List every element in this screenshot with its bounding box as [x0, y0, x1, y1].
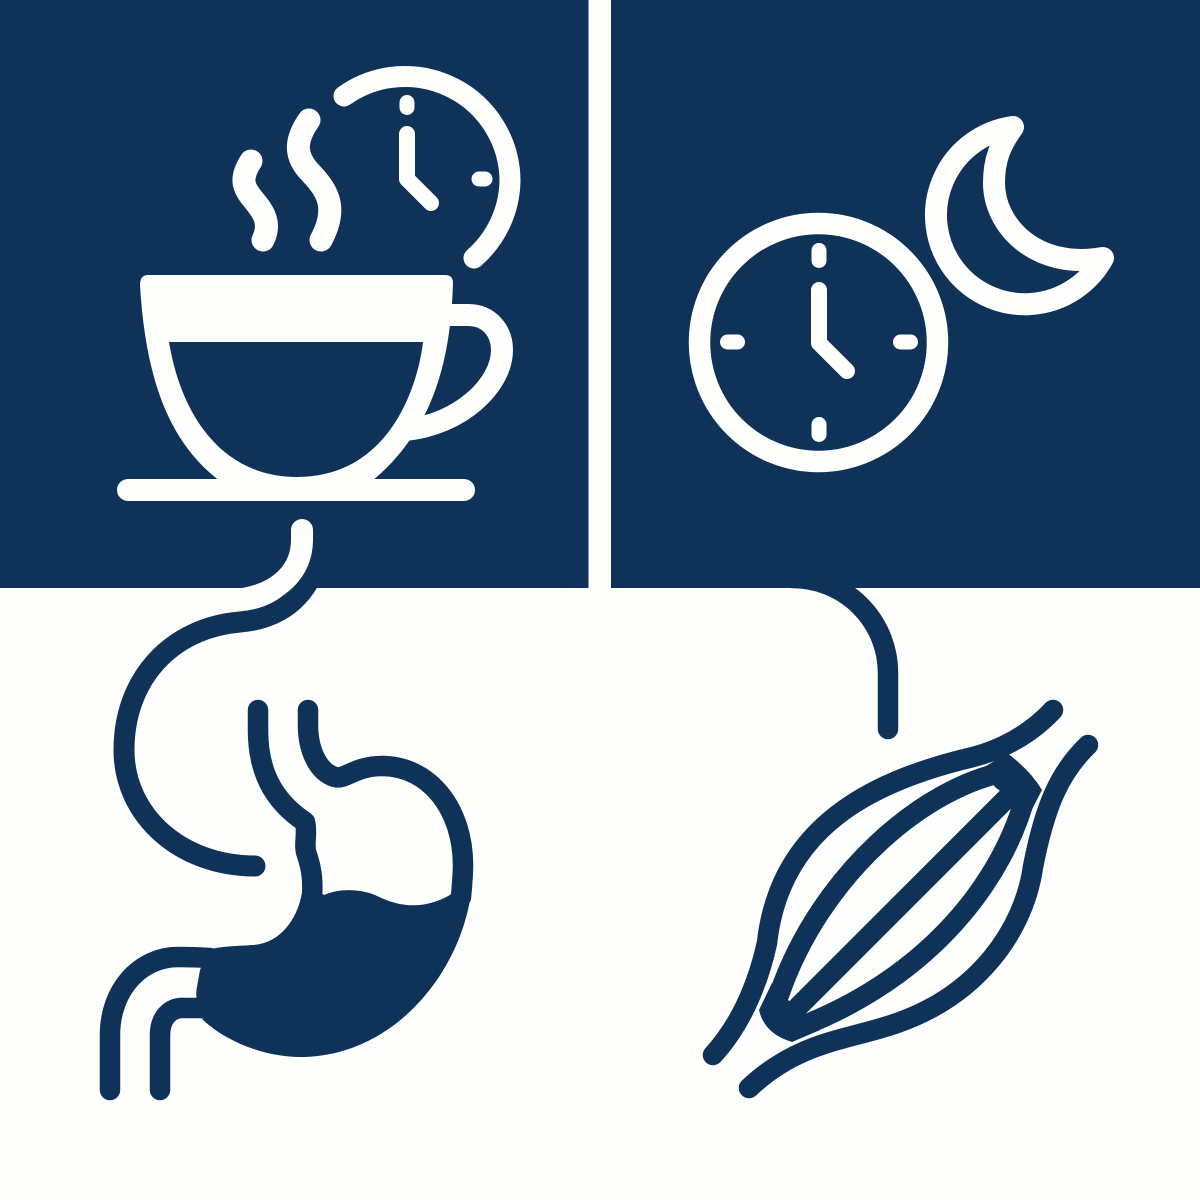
icon: stomach: [110, 710, 473, 1090]
muscle end caps: [759, 753, 1042, 1042]
muscle fibres and tendons: [713, 710, 1088, 1088]
icon: crescent moon: [936, 127, 1103, 304]
panel: coffee timing: [0, 0, 588, 588]
stomach contents: [196, 867, 473, 1057]
icon: muscle: [713, 710, 1088, 1088]
icon: clock: [700, 224, 938, 462]
panel: bedtime: [611, 0, 1200, 588]
connector: coffee to stomach: [124, 530, 312, 866]
icon: partial clock: [344, 76, 510, 258]
stomach outline and esophagus: [110, 710, 463, 1090]
icon: coffee cup with saucer: [117, 275, 502, 501]
icon: steam: [244, 120, 330, 240]
connector: bedtime to muscle: [793, 578, 888, 729]
